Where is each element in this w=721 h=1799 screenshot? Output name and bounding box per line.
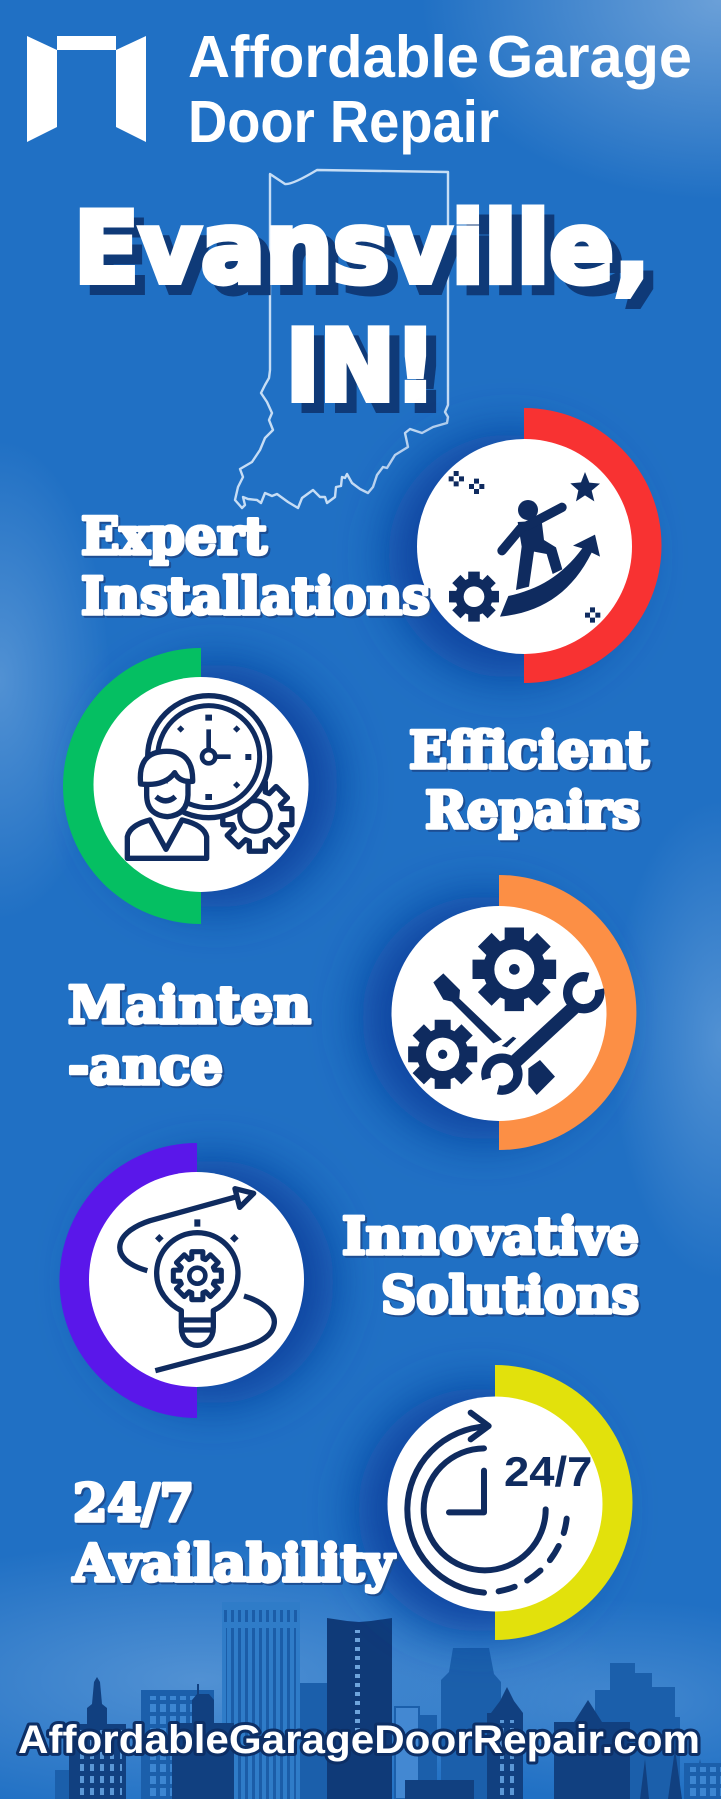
shadow halo xyxy=(358,1388,602,1632)
heading: efficient repairs: Repairs xyxy=(425,781,640,841)
logo wordmark: Door Repair xyxy=(188,89,499,155)
logo icon: garage door frame xyxy=(27,36,146,142)
heading: expert installations: Installations xyxy=(81,567,430,627)
white disc xyxy=(417,439,632,654)
purple half ring xyxy=(60,1143,197,1418)
skyline xyxy=(55,1602,721,1799)
panel: maintenance xyxy=(362,875,636,1150)
white disc xyxy=(94,677,308,892)
shadow halo xyxy=(362,896,606,1140)
heading: innovative solutions xyxy=(342,1207,639,1326)
website url: AffordableGarageDoorRepair.com xyxy=(18,1718,700,1762)
icon: 24/7 clock xyxy=(407,1413,592,1593)
panel: expert installations xyxy=(388,408,662,683)
logo wordmark: Garage xyxy=(487,24,692,90)
icon: 24/7 clock: 24/7 xyxy=(504,1449,592,1495)
heading: 24/7 availability: 24/7 xyxy=(73,1474,194,1534)
heading: expert installations: Expert xyxy=(81,507,267,567)
skyline: back buildings xyxy=(55,1648,680,1799)
shadow halo xyxy=(94,664,338,908)
heading: 24/7 availability xyxy=(72,1474,395,1594)
panel: 24/7 availability xyxy=(358,1365,633,1640)
shadow halo xyxy=(388,434,632,678)
white disc xyxy=(392,906,606,1121)
green half ring xyxy=(63,648,201,924)
skyline: dark building windows xyxy=(74,1720,721,1799)
state outline: Indiana xyxy=(235,170,448,508)
logo wordmark xyxy=(188,24,692,155)
title: Evansville, xyxy=(74,192,650,306)
heading: efficient repairs xyxy=(409,721,649,841)
icon: climber with rising arrow xyxy=(449,471,600,623)
yellow half ring xyxy=(495,1365,633,1640)
icon: technician, clock and gear xyxy=(127,696,292,858)
heading: maintenance: Mainten xyxy=(68,976,311,1036)
icon: light bulb with gear and path xyxy=(120,1189,274,1371)
heading: 24/7 availability: Availability xyxy=(72,1534,395,1594)
heading: expert installations xyxy=(81,507,430,627)
panel: efficient repairs xyxy=(63,648,338,924)
heading: maintenance xyxy=(68,976,311,1097)
heading: innovative solutions: Innovative xyxy=(342,1207,639,1267)
skyline: dark buildings xyxy=(69,1677,705,1799)
red half ring xyxy=(524,408,662,683)
skyline: left building windows xyxy=(146,1696,209,1799)
heading: maintenance: -ance xyxy=(68,1037,223,1097)
icon: gears, screwdriver and wrench xyxy=(408,928,600,1095)
logo wordmark: Affordable xyxy=(188,24,479,90)
title xyxy=(74,192,650,424)
skyline: light striped tower xyxy=(222,1602,300,1799)
shadow halo xyxy=(90,1160,334,1404)
heading: innovative solutions: Solutions xyxy=(381,1266,639,1326)
logo xyxy=(27,24,692,155)
heading: efficient repairs: Efficient xyxy=(409,721,649,781)
title: IN! xyxy=(286,310,436,424)
skyline: small light towers xyxy=(395,1707,437,1799)
panel: innovative solutions xyxy=(60,1143,334,1418)
skyline: dark tall tower xyxy=(327,1618,392,1799)
orange half ring xyxy=(499,875,636,1150)
white disc xyxy=(89,1172,304,1387)
white disc xyxy=(388,1396,602,1612)
